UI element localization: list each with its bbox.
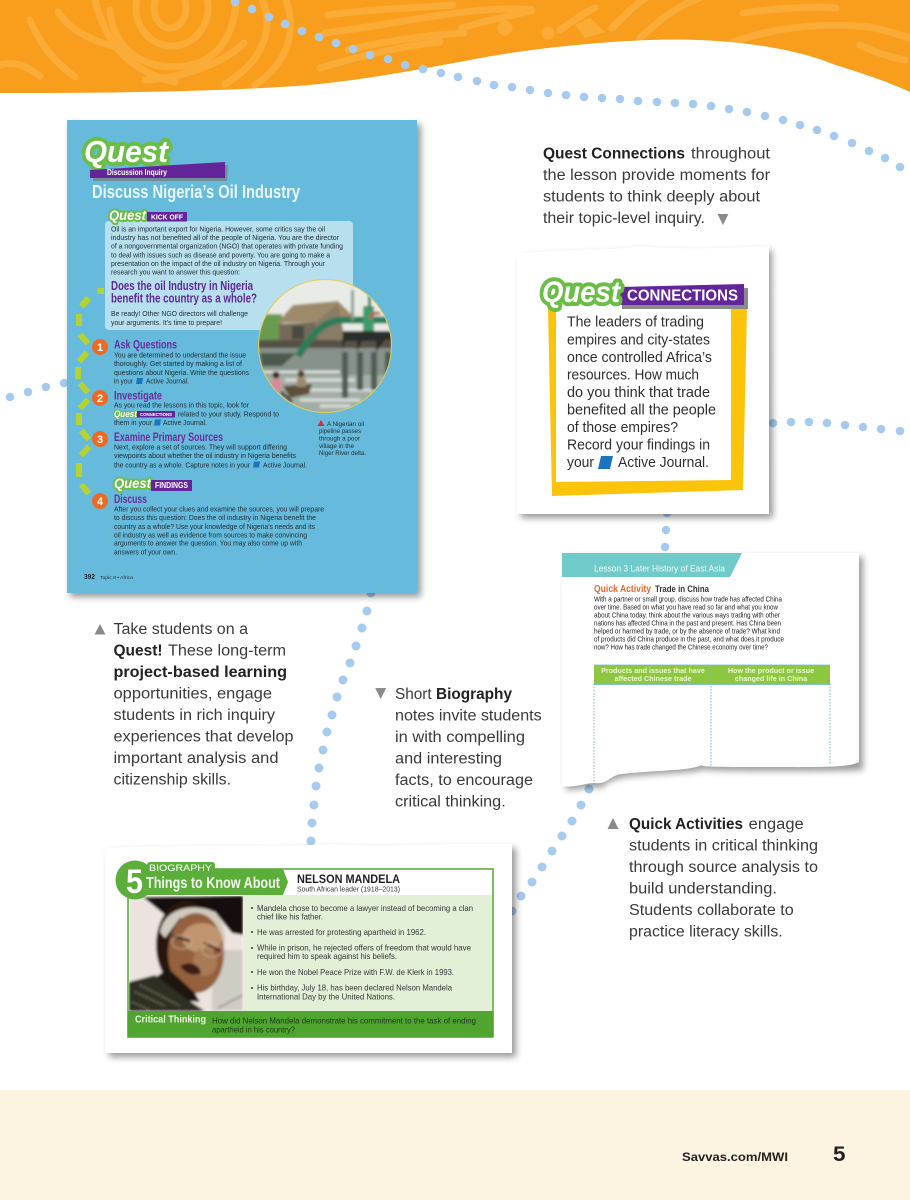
bullet list: required him to speak against his beliefs. [257,951,397,961]
step 3: Examine Primary Sources [92,431,307,469]
badge: 5 Things to Know About: 5 [126,863,143,901]
step 3: Examine Primary Sources: the country as a whole. Capture notes in your [114,460,250,469]
step 3: Examine Primary Sources: viewpoints about whether the oil industry in Nigeria benefits [114,451,296,460]
blank table: changed life in China [735,674,808,683]
bullet list: Mandela chose to become a lawyer instead of becoming a clan [257,903,473,913]
text block: Quick Activities: Students collaborate to [629,902,794,919]
card text: The leaders of trading [567,315,704,331]
kick off box: of a nongovernmental organization (NGO) that operates with private funding [111,242,343,251]
page footer [84,574,133,581]
card text: do you think that trade [567,385,710,401]
kick off box: to deal with issues such as disease and poverty. You are going to make a [111,250,331,259]
step 4: Discuss: answers of your own. [114,547,177,556]
badge: 5 Things to Know About [116,860,288,901]
step 4: Discuss: 4 [97,496,104,508]
banner: Quest Connections [542,276,748,309]
step 2: Investigate: Active Journal. [163,418,207,427]
text block: Quest Connections intro: their topic-level inquiry. [543,210,705,227]
Quest logo: Quest [84,134,170,169]
step 2: Investigate: Investigate [114,390,162,402]
frame [128,869,493,1037]
photo caption: pipeline passes [319,428,362,435]
text block: Take students on a Quest [94,621,294,788]
step 2: Investigate: them in your [114,418,152,427]
text block: Quick Activities: Quick Activities [629,816,743,833]
step 4: Discuss: to discuss this question: Does the oil industry in Nigeria benefit the [114,513,316,522]
dotted path: top [231,0,904,171]
step 1: Ask Questions: Active Journal. [146,376,189,386]
step 1: Ask Questions [92,339,249,386]
footer band [0,1090,910,1200]
banner: Quest Connections: CONNECTIONS [627,288,738,304]
text block: Take students on a Quest: experiences that develop [114,728,294,746]
kick off box: Does the oil Industry in Nigeria [111,279,254,293]
step 4: Discuss: After you collect your clues and examine the sources, you will prepare [114,505,324,514]
step 4: Discuss: Discuss [114,494,147,506]
text block: Short Biography notes: and interesting [395,750,502,768]
text block: Take students on a Quest: Take students on a [114,621,248,638]
bullet list: His birthday, July 18, has been declared Nelson Mandela [257,983,452,993]
card text: Record your findings in [567,438,710,454]
text block: Short Biography notes: Short [395,686,432,703]
portrait: Nelson Mandela [129,896,243,1011]
kick off box [105,207,353,330]
photo caption [318,420,366,457]
Quest findings label: FINDINGS [155,481,188,490]
bullet list [251,903,473,1001]
photo caption: village in the [319,443,354,450]
activity text: of products did China produce in the past, and what does it produce [594,635,784,644]
text block: Quick Activities: through source analysis to [629,859,818,876]
step 2: Investigate: As you read the lessons in this topic, look for [114,400,249,410]
activity text: nations has affected China in the past and present. Has China been [594,619,781,628]
text block: Short Biography notes: critical thinking. [395,794,506,810]
text block: Quest Connections intro: Quest Connections [543,146,685,162]
card text: empires and city-states [567,332,710,348]
text block: Quick Activities [608,816,818,940]
kick off box: presentation on the impact of the oil industry on Nigeria. Through your [111,259,325,268]
kick off box: your arguments. It’s time to prepare! [111,318,222,327]
critical thinking bar [128,1011,494,1038]
text block: Quest Connections intro [543,146,771,227]
dotted path: left and right connectors [6,379,904,551]
banner: Quest Connections: Quest [542,276,622,309]
page footer: Topic 8 • Africa [100,575,133,580]
text block: Quick Activities: engage [749,816,804,833]
card text: of those empires? [567,420,678,436]
activity text: about China today, think about the various ways trading with other [594,611,781,620]
text block: Quick Activities: students in critical thinking [629,838,818,854]
kick off box: KICK OFF [151,212,184,222]
panel: Biography card [105,844,516,1057]
name heading [297,874,400,894]
step 2: Investigate [92,390,279,427]
Quest findings label: Quest [114,475,152,491]
light green panel [243,895,492,1011]
step 2: Investigate: 2 [97,393,103,405]
step 4: Discuss: oil industry as well as evidence from sources to make convincing [114,530,307,539]
badge: 5 Things to Know About: BIOGRAPHY [149,863,213,874]
text block: Take students on a Quest: These long-term [168,642,286,660]
dotted path: centre [306,588,376,846]
step 1: Ask Questions: questions about Nigeria. Write the questions [114,368,249,377]
badge: 5 Things to Know About: Things to Know About [146,875,281,892]
step 3: Examine Primary Sources: Examine Primary Sources [114,432,223,444]
critical thinking bar: Critical Thinking [135,1015,206,1026]
dashed green path [75,288,104,496]
card text: Active Journal. [618,455,709,471]
critical thinking bar: apartheid in his country? [212,1025,295,1035]
bullet list: chief like his father. [257,911,323,921]
bullet list: He won the Nobel Peace Prize with F.W. de Klerk in 1993. [257,967,454,977]
text block: Take students on a Quest: citizenship skills. [114,772,231,788]
step 1: Ask Questions: 1 [97,342,103,354]
lesson banner [562,553,742,577]
step 1: Ask Questions: thoroughly. Get started by making a list of [114,359,243,368]
icon: journal [598,456,613,469]
photo caption: A Nigerian oil [327,421,364,428]
bullet list: International Day by the United Nations. [257,991,395,1001]
panel: Quick Activity card [562,553,863,790]
panel: Quest Connections card [517,246,773,518]
kick off box: industry has not benefited all of the people of Nigeria. You are the director [111,233,339,242]
step 2: Investigate: Quest [114,409,138,419]
text block: Short Biography notes [375,686,542,810]
name heading: NELSON MANDELA [297,874,400,886]
Quest findings label [114,475,192,491]
photo: oil pipeline in Nigerian village [258,278,392,415]
text block: Take students on a Quest: important analysis and [114,750,278,767]
activity text: now? How has trade changed the Chinese economy over time? [594,643,768,652]
card text: resources. How much [567,367,699,383]
text block: Take students on a Quest: opportunities, engage [114,686,272,702]
page number: 5 [833,1142,846,1166]
blank table [594,665,830,782]
header: orange wave banner [0,0,910,93]
activity text [594,595,784,652]
kick off box: research you want to answer this question: [111,268,240,277]
activity heading [594,583,710,595]
kick off box: Be ready! Other NGO directors will challenge [111,309,248,318]
step 3: Examine Primary Sources: Active Journal. [263,460,307,469]
step 2: Investigate: CONNECTIONS [140,412,172,417]
bullet list: While in prison, he rejected offers of freedom that would have [257,943,471,953]
card text [567,315,716,471]
name heading: South African leader (1918–2013) [297,884,400,894]
step 3: Examine Primary Sources: Next, explore a set of sources. They will support differing [114,442,287,452]
text block: Quest Connections intro: the lesson provide moments for [543,167,770,184]
card text: once controlled Africa’s [567,350,712,366]
yellow frame [548,308,747,496]
step 1: Ask Questions: You are determined to understand the issue [114,350,246,359]
kick off box: Oil is an important export for Nigeria. However, some critics say the oil [111,224,325,234]
text block: Take students on a Quest: project-based learning [114,664,287,681]
text block: Take students on a Quest: students in rich inquiry [114,707,275,724]
step 1: Ask Questions: in your [114,376,133,386]
activity text: With a partner or small group, discuss how trade has affected China [594,595,782,604]
card text: your [567,455,594,471]
kick off box: benefit the country as a whole? [111,292,257,306]
text block: Short Biography notes: notes invite students [395,708,542,724]
blank table: Products and issues that have [601,666,705,675]
text block: Quest Connections intro: students to think deeply about [543,188,761,206]
blank table: affected Chinese trade [614,674,692,683]
step 4: Discuss [92,493,324,556]
footer link: Savvas.com/MWI [682,1150,788,1164]
photo caption: Niger River delta. [319,450,366,457]
text block: Short Biography notes: facts, to encourage [395,772,533,789]
page footer: 392 [84,574,95,581]
kick off box: Quest [109,207,147,223]
photo caption: through a poor [319,436,361,442]
text block: Quick Activities: build understanding. [629,880,777,898]
step 1: Ask Questions: Ask Questions [114,340,177,352]
card text: benefited all the people [567,402,716,418]
dotted path: lower right [508,784,594,916]
activity text: over time. Based on what you have read so far and what you know [594,603,779,612]
step 4: Discuss: country as a whole? Use your knowledge of Nigeria’s needs and its [114,522,315,531]
step 2: Investigate: related to your study. Respond to [178,409,279,418]
text block: Short Biography notes: Biography [436,686,512,703]
activity heading: Quick Activity [594,583,651,595]
activity heading: Trade in China [655,584,710,595]
step 3: Examine Primary Sources: 3 [97,434,103,446]
text block: Quest Connections intro: throughout [691,146,771,162]
bullet list: He was arrested for protesting apartheid in 1962. [257,927,426,937]
text block: Take students on a Quest: Quest! [114,642,162,660]
page title: Discuss Nigeria’s Oil Industry [92,181,301,202]
step 4: Discuss: arguments to answer the question. You may also come up with [114,539,302,548]
banner: Discussion Inquiry [90,162,228,181]
text block: Quick Activities: practice literacy skills. [629,924,783,940]
critical thinking bar: How did Nelson Mandela demonstrate his commitment to the task of ending [212,1015,476,1025]
activity text: helped or harmed by trade, or by the absence of trade? What kind [594,627,780,636]
banner: Discussion Inquiry: Discussion Inquiry [107,168,167,177]
blank table: How the product or issue [728,666,814,675]
panel: Quest textbook page [67,120,421,597]
text block: Short Biography notes: in with compelling [395,729,525,746]
lesson banner: Lesson 3 Later History of East Asia [594,564,726,574]
